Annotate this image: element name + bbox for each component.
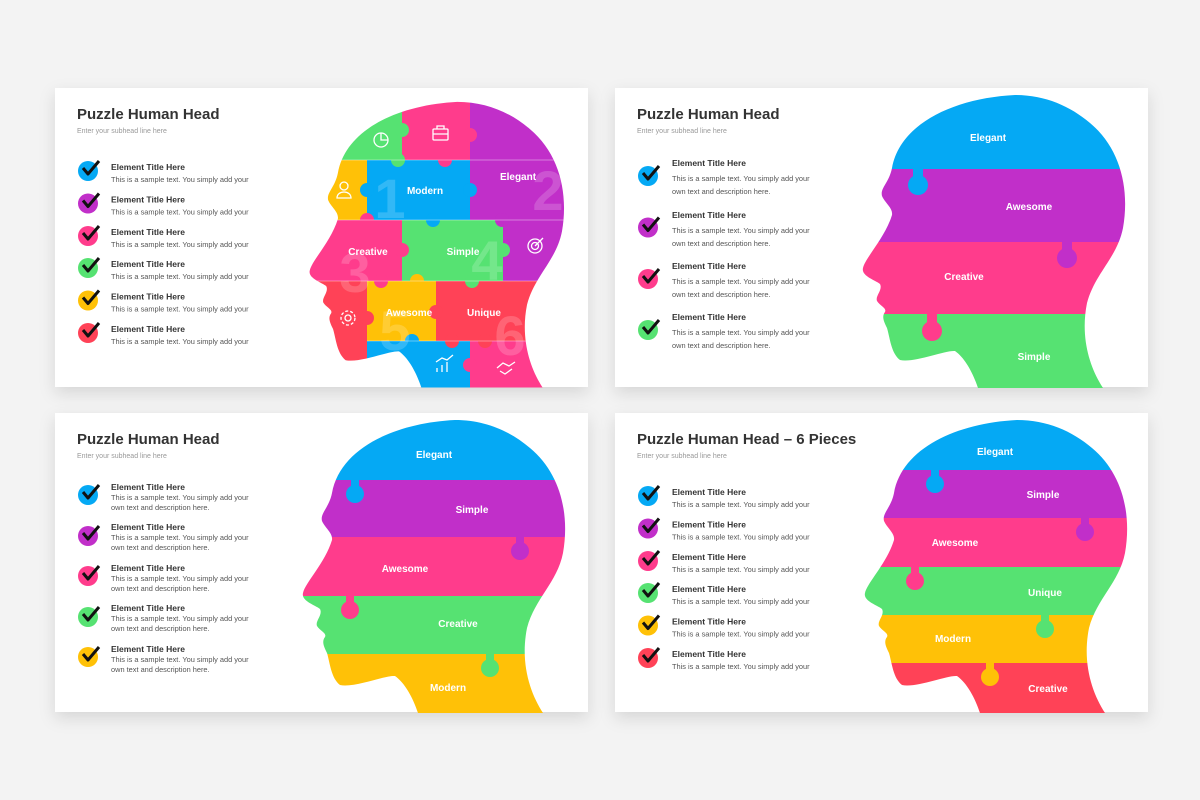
list: five elements: This is a sample text. You simply add your <box>111 655 249 664</box>
list: four elements: Element Title Here <box>672 210 746 220</box>
list: six elements: This is a sample text. You simply add your <box>111 175 249 184</box>
list: five elements: This is a sample text. You simply add your <box>111 614 249 623</box>
head: five bands: Awesome <box>382 564 429 575</box>
subhead: Enter your subhead line here <box>637 128 727 135</box>
list: six elements: This is a sample text. You simply add your <box>111 272 249 281</box>
head puzzle: 12 pieces: 2 <box>532 159 564 222</box>
head: six bands: Unique <box>1028 588 1062 599</box>
title: Puzzle Human Head <box>637 106 780 123</box>
list: six elements <box>78 161 249 346</box>
list: five elements: Element Title Here <box>111 603 185 613</box>
list: six elements: This is a sample text. You simply add your <box>111 337 249 346</box>
subhead: Enter your subhead line here <box>77 128 167 135</box>
list: five elements: own text and description here. <box>111 624 210 633</box>
list: four elements: Element Title Here <box>672 312 746 322</box>
head puzzle: 12 pieces: Awesome <box>386 308 433 319</box>
head: four bands <box>862 95 1126 388</box>
list: four elements: Element Title Here <box>672 261 746 271</box>
list: six elements: Element Title Here <box>672 616 746 626</box>
list: six elements: Element Title Here <box>672 552 746 562</box>
list: six elements: Element Title Here <box>672 520 746 530</box>
list: six elements: This is a sample text. You simply add your <box>111 304 249 314</box>
list: six elements <box>638 486 810 671</box>
head: six bands <box>864 420 1128 713</box>
list: six elements: Element Title Here <box>672 649 746 659</box>
list: six elements: Element Title Here <box>672 487 746 497</box>
head puzzle: 12 pieces: Simple <box>447 247 480 258</box>
head: five bands: Elegant <box>416 450 453 461</box>
list: five elements: Element Title Here <box>111 482 185 492</box>
list: six elements: Element Title Here <box>111 324 185 334</box>
head: five bands <box>302 420 566 713</box>
list: five elements: Element Title Here <box>111 644 185 654</box>
numbers: 1 <box>374 167 406 230</box>
list: six elements: Element Title Here <box>672 584 746 594</box>
head puzzle: 12 pieces: Unique <box>467 308 501 319</box>
list: four elements: This is a sample text. You simply add your <box>672 277 810 286</box>
knobs <box>402 123 409 137</box>
head: six bands: Elegant <box>977 447 1014 458</box>
list: four elements: This is a sample text. You simply add your <box>672 328 810 337</box>
list: six elements: This is a sample text. You simply add your <box>672 662 810 671</box>
head: four bands: Creative <box>944 272 984 283</box>
list: four elements: Element Title Here <box>672 158 746 168</box>
list: five elements: own text and description here. <box>111 665 210 674</box>
panel: slide 1 <box>55 88 588 391</box>
panel: slide 2 <box>615 88 1148 394</box>
list: six elements: Element Title Here <box>111 227 185 237</box>
head puzzle: 12 pieces: 3 <box>339 241 371 304</box>
head: six bands: Modern <box>935 634 971 645</box>
list: five elements <box>78 482 249 674</box>
list: six elements: Element Title Here <box>111 194 185 204</box>
list: four elements: own text and description here. <box>672 187 771 196</box>
panel: slide 3 <box>55 413 588 714</box>
head puzzle: 12 pieces: Creative <box>348 247 388 258</box>
list: six elements: Element Title Here <box>111 162 185 172</box>
list: four elements <box>638 158 810 350</box>
labels: Modern <box>407 186 443 197</box>
head puzzle: 12 pieces: Elegant <box>500 172 537 183</box>
head: five bands: Creative <box>438 619 478 630</box>
title: Puzzle Human Head <box>77 106 220 123</box>
icons <box>374 133 388 147</box>
list: four elements: own text and description here. <box>672 290 771 299</box>
list: six elements: This is a sample text. You simply add your <box>672 532 810 542</box>
head: four bands: Simple <box>1018 352 1051 363</box>
head: six bands: Awesome <box>932 538 979 549</box>
list: four elements: This is a sample text. You simply add your <box>672 226 810 235</box>
head: six bands: Creative <box>1028 684 1068 695</box>
list: five elements: This is a sample text. You simply add your <box>111 574 249 583</box>
list: four elements: own text and description here. <box>672 239 771 248</box>
title: Puzzle Human Head – 6 Pieces <box>637 431 856 448</box>
list: five elements: own text and description here. <box>111 503 210 512</box>
list: six elements: This is a sample text. You simply add your <box>672 597 810 606</box>
subhead: Enter your subhead line here <box>637 453 727 460</box>
list: five elements: This is a sample text. You simply add your <box>111 493 249 502</box>
panel: slide 4 <box>615 413 1148 715</box>
list: five elements: own text and description here. <box>111 584 210 593</box>
list: six elements: This is a sample text. You simply add your <box>111 208 249 216</box>
list: six elements: Element Title Here <box>111 259 185 269</box>
head: six bands: Simple <box>1027 490 1060 501</box>
list: four elements: own text and description here. <box>672 341 771 350</box>
list: five elements: Element Title Here <box>111 563 185 573</box>
head puzzle: 12 pieces: 5 <box>379 299 411 362</box>
head: four bands: Elegant <box>970 133 1007 144</box>
title: Puzzle Human Head <box>77 431 220 448</box>
list: six elements: This is a sample text. You simply add your <box>672 565 810 574</box>
list: six elements: This is a sample text. You simply add your <box>672 630 810 638</box>
head puzzle: 12 pieces: 6 <box>494 304 526 367</box>
head: five bands: Modern <box>430 683 466 694</box>
head: four bands: Awesome <box>1006 202 1053 213</box>
list: five elements: Element Title Here <box>111 522 185 532</box>
head: five bands: Simple <box>456 505 489 516</box>
list: six elements: This is a sample text. You simply add your <box>111 240 249 249</box>
subhead: Enter your subhead line here <box>77 453 167 460</box>
list: six elements: Element Title Here <box>111 292 185 302</box>
list: five elements: This is a sample text. You simply add your <box>111 533 249 542</box>
list: six elements: This is a sample text. You simply add your <box>672 500 810 509</box>
list: five elements: own text and description here. <box>111 543 210 552</box>
list: four elements: This is a sample text. You simply add your <box>672 174 810 183</box>
head puzzle: 12 pieces: 4 <box>471 229 503 292</box>
head puzzle: 12 pieces <box>310 102 564 388</box>
